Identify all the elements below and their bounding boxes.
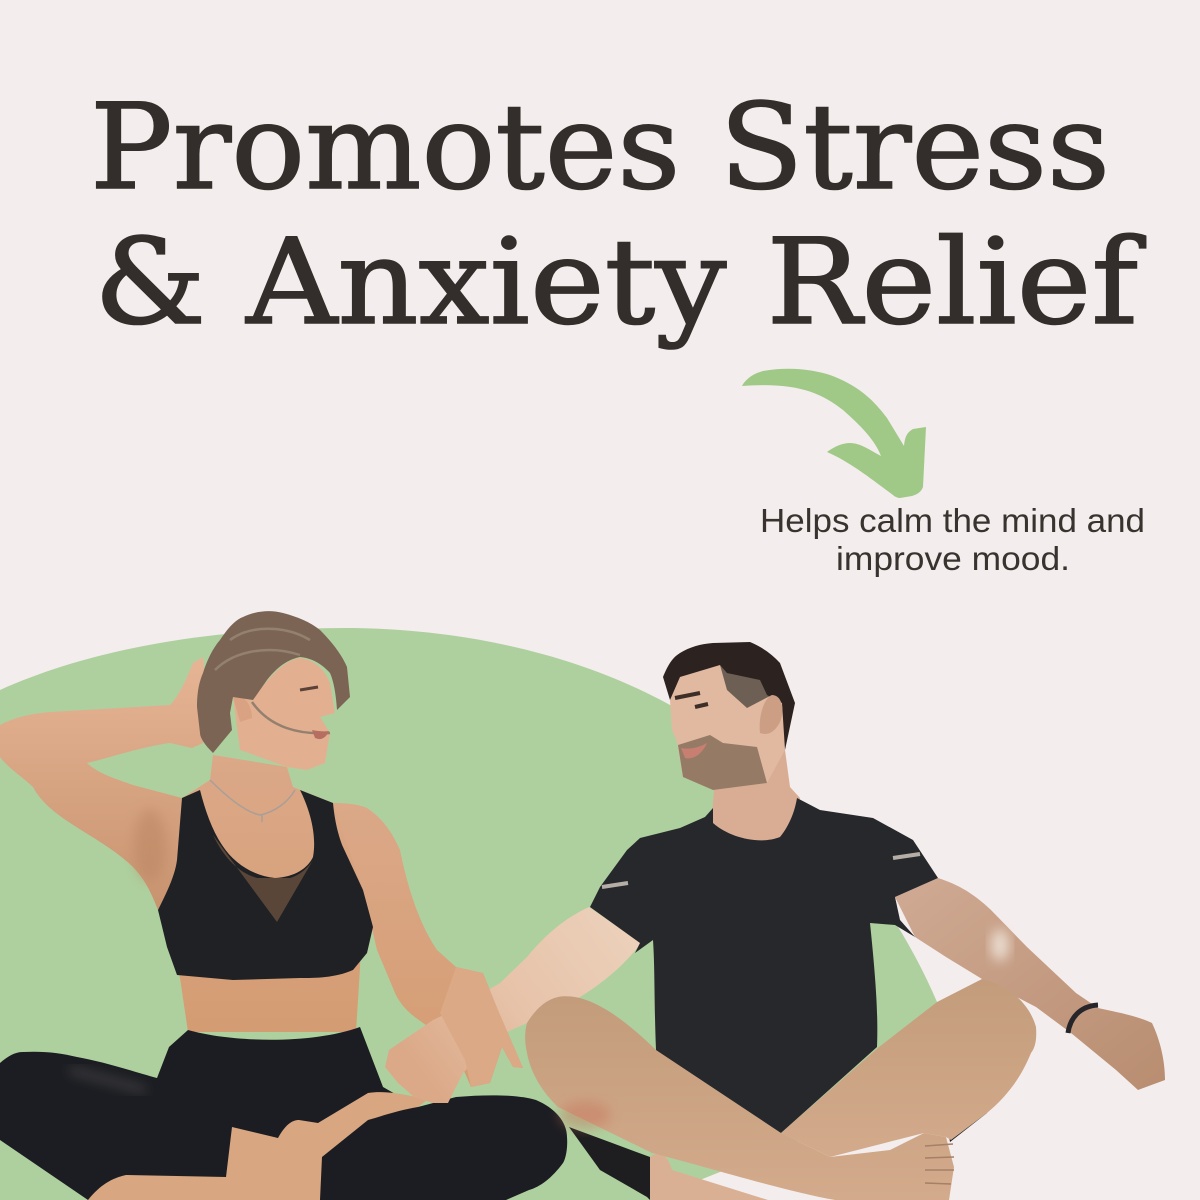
man toe lines bbox=[925, 1144, 954, 1184]
woman hair bbox=[197, 611, 350, 753]
man ear bbox=[760, 695, 782, 734]
green background shape bbox=[0, 628, 937, 1200]
woman face bbox=[233, 658, 335, 770]
man hair bbox=[663, 642, 795, 750]
man t-shirt bbox=[590, 798, 938, 1133]
woman torso and neck bbox=[158, 755, 363, 1032]
woman smile bbox=[312, 730, 329, 739]
woman foot and shin bbox=[88, 1092, 427, 1200]
woman hand overlap bbox=[440, 967, 523, 1087]
title bbox=[90, 78, 1146, 351]
caption text: improve mood. bbox=[836, 540, 1070, 577]
man mouth bbox=[681, 743, 707, 758]
man lower foot bbox=[650, 1154, 768, 1200]
man eye and brow bbox=[675, 693, 708, 707]
title: & Anxiety Relief bbox=[94, 213, 1146, 351]
photo: woman bbox=[0, 611, 567, 1200]
woman sports bra bbox=[158, 790, 373, 980]
woman leggings bbox=[0, 1027, 567, 1200]
man arm highlight bbox=[991, 929, 1009, 961]
woman hair highlights bbox=[215, 629, 330, 733]
man hair fade bbox=[720, 665, 770, 708]
man arm right and fist bbox=[895, 878, 1165, 1090]
man right thigh bbox=[781, 979, 1036, 1157]
man neck bbox=[711, 750, 800, 846]
woman raised arm bbox=[0, 657, 207, 910]
woman ear bbox=[233, 696, 252, 722]
photo: man bbox=[385, 642, 1165, 1200]
woman armpit shading bbox=[134, 809, 166, 881]
man shorts bbox=[569, 1113, 987, 1200]
woman necklace bbox=[210, 780, 295, 822]
woman eye bbox=[300, 687, 318, 690]
man left thigh and shin bbox=[525, 996, 954, 1200]
title: Promotes Stress bbox=[90, 78, 1110, 216]
man beard bbox=[678, 735, 767, 790]
icon: curved green arrow bbox=[742, 369, 926, 498]
man arm left and hand bbox=[385, 907, 641, 1103]
man knee shading bbox=[559, 1101, 611, 1129]
man head bbox=[670, 662, 785, 790]
man sleeve stripes bbox=[602, 854, 920, 887]
woman bra mesh bbox=[213, 835, 313, 922]
caption text bbox=[760, 502, 1145, 577]
caption text: Helps calm the mind and bbox=[760, 502, 1145, 539]
woman far arm and hand bbox=[333, 803, 523, 1087]
woman leg highlight bbox=[70, 1070, 145, 1090]
man wristband bbox=[1068, 1005, 1098, 1033]
